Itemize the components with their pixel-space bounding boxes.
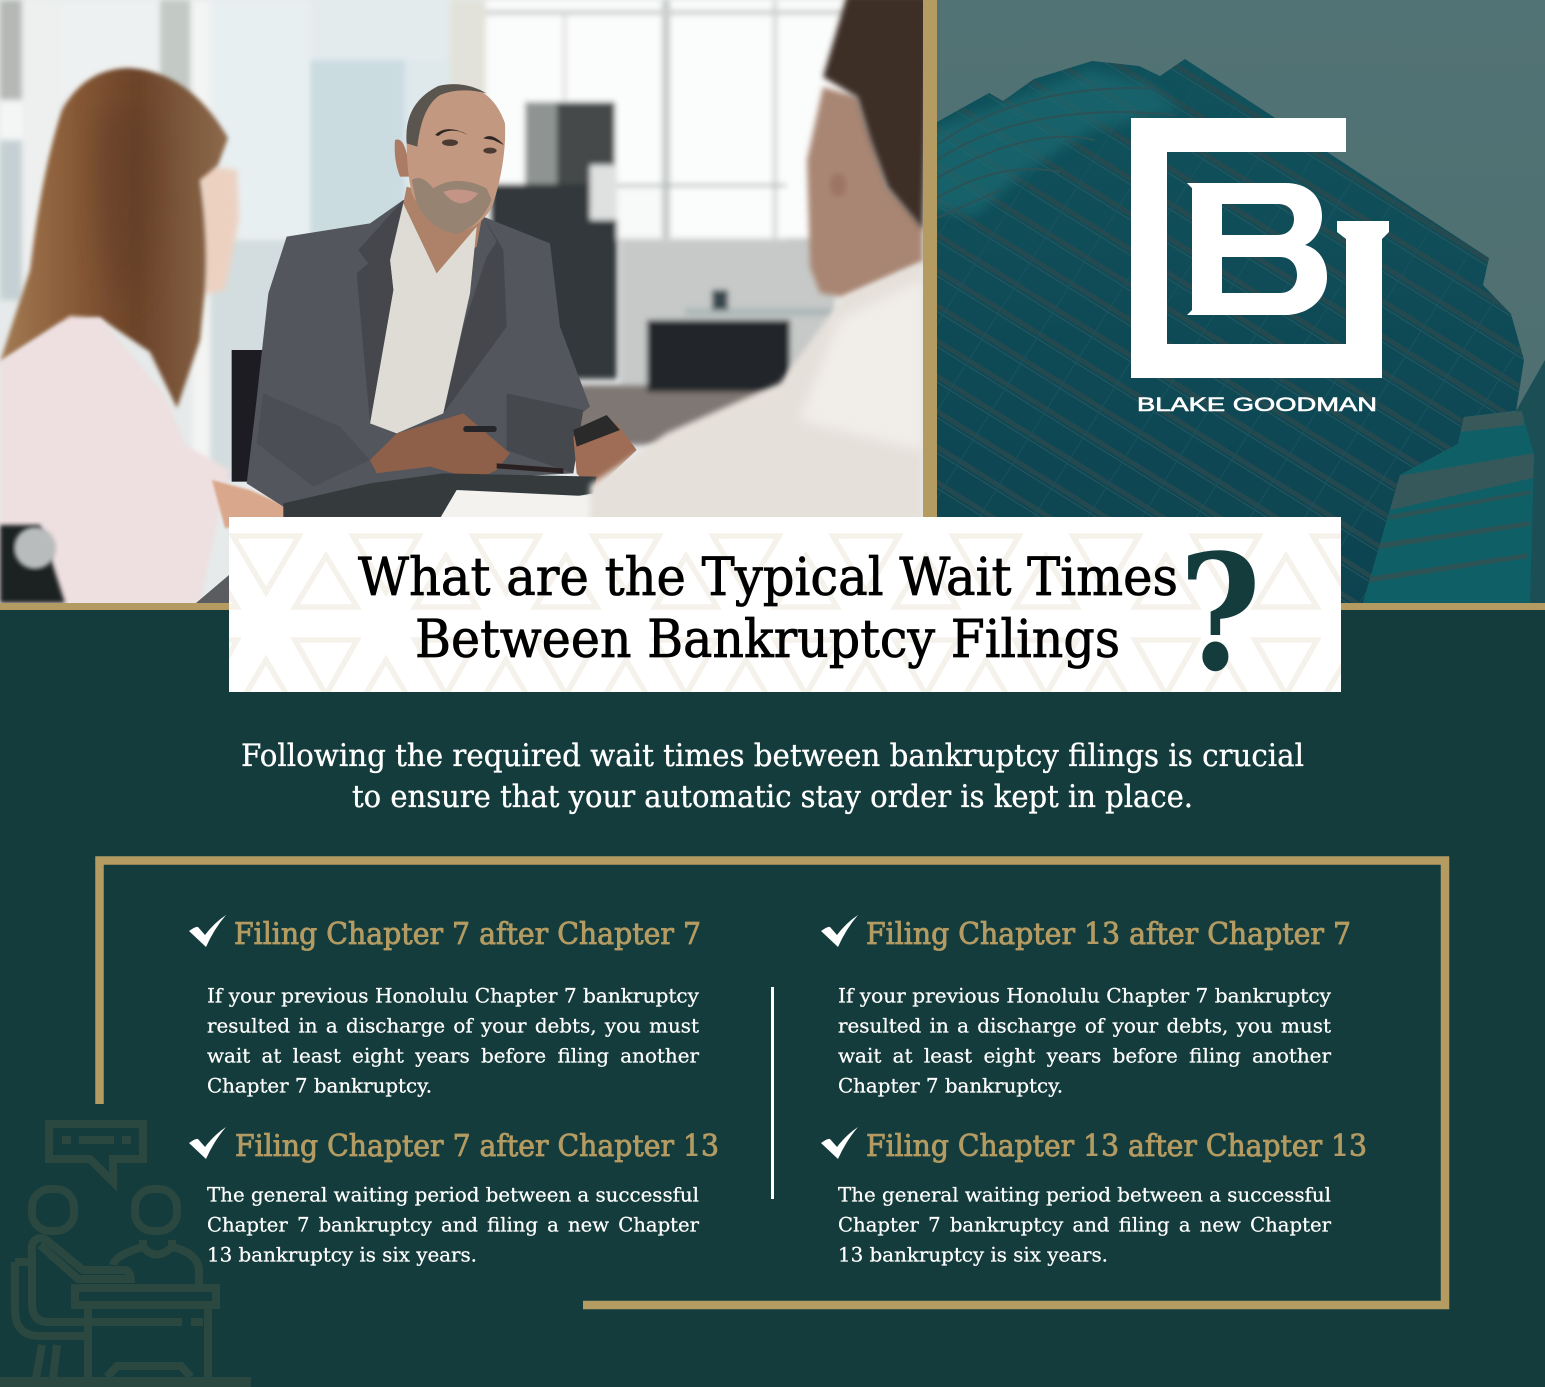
section body: If your previous Honolulu Chapter 7 bankruptcy xyxy=(838,984,1332,1008)
gold horizontal band xyxy=(0,603,1545,610)
icon: check mark xyxy=(189,915,226,947)
logo wordmark: BLAKE GOODMAN xyxy=(1137,394,1377,416)
title text: Between Bankruptcy Filings xyxy=(415,610,1120,670)
section body: Chapter 7 bankruptcy. xyxy=(207,1074,432,1098)
section body xyxy=(838,1182,1331,1266)
section: Filing Chapter 7 after Chapter 7 xyxy=(189,915,701,1098)
section body: wait at least eight years before filing another xyxy=(838,1044,1331,1068)
section heading: Filing Chapter 7 after Chapter 13 xyxy=(235,1129,719,1164)
icon: check mark xyxy=(821,915,858,947)
section heading: Filing Chapter 13 after Chapter 13 xyxy=(866,1129,1367,1164)
icon: check mark xyxy=(821,1127,858,1159)
section heading: Filing Chapter 13 after Chapter 7 xyxy=(866,917,1351,952)
man seen from behind at right xyxy=(590,0,930,603)
section body: 13 bankruptcy is six years. xyxy=(838,1242,1108,1266)
title text: What are the Typical Wait Times xyxy=(358,548,1178,608)
man in grey suit at centre, authored in 3x coordinates xyxy=(232,84,637,518)
section body: wait at least eight years before filing another xyxy=(207,1044,699,1068)
intro paragraph: to ensure that your automatic stay order is kept in place. xyxy=(352,779,1193,815)
intro paragraph xyxy=(241,738,1304,815)
background icon: consultation at desk xyxy=(0,1124,251,1382)
section body: The general waiting period between a successful xyxy=(838,1182,1331,1206)
section body: Chapter 7 bankruptcy and filing a new Chapter xyxy=(207,1212,699,1236)
building background panel xyxy=(930,0,1545,603)
logo: BG monogram xyxy=(1131,118,1389,416)
icon: check mark xyxy=(189,1127,226,1159)
intro paragraph: Following the required wait times between bankruptcy filings is crucial xyxy=(241,738,1304,774)
section body: Chapter 7 bankruptcy. xyxy=(838,1074,1063,1098)
section body: Chapter 7 bankruptcy and filing a new Chapter xyxy=(838,1212,1331,1236)
section body: The general waiting period between a successful xyxy=(207,1182,699,1206)
section body: resulted in a discharge of your debts, you must xyxy=(838,1014,1331,1038)
section body: If your previous Honolulu Chapter 7 bankruptcy xyxy=(207,984,700,1008)
section body: resulted in a discharge of your debts, you must xyxy=(207,1014,699,1038)
section: Filing Chapter 13 after Chapter 7 xyxy=(821,915,1351,1098)
gold content frame xyxy=(100,860,1445,1305)
section body xyxy=(207,984,700,1098)
centre divider line xyxy=(771,987,774,1199)
gold vertical divider xyxy=(923,0,937,603)
question mark: ? xyxy=(1179,519,1261,707)
section: Filing Chapter 13 after Chapter 13 xyxy=(821,1127,1367,1266)
section: Filing Chapter 7 after Chapter 13 xyxy=(189,1127,719,1266)
section body: 13 bankruptcy is six years. xyxy=(207,1242,477,1266)
section heading: Filing Chapter 7 after Chapter 7 xyxy=(234,917,701,952)
section body xyxy=(207,1182,699,1266)
woman client at left xyxy=(0,68,300,603)
title panel with triangle pattern xyxy=(229,517,1341,707)
title text xyxy=(358,548,1178,670)
photo: attorney meeting with two clients xyxy=(0,0,930,603)
section body xyxy=(838,984,1332,1098)
